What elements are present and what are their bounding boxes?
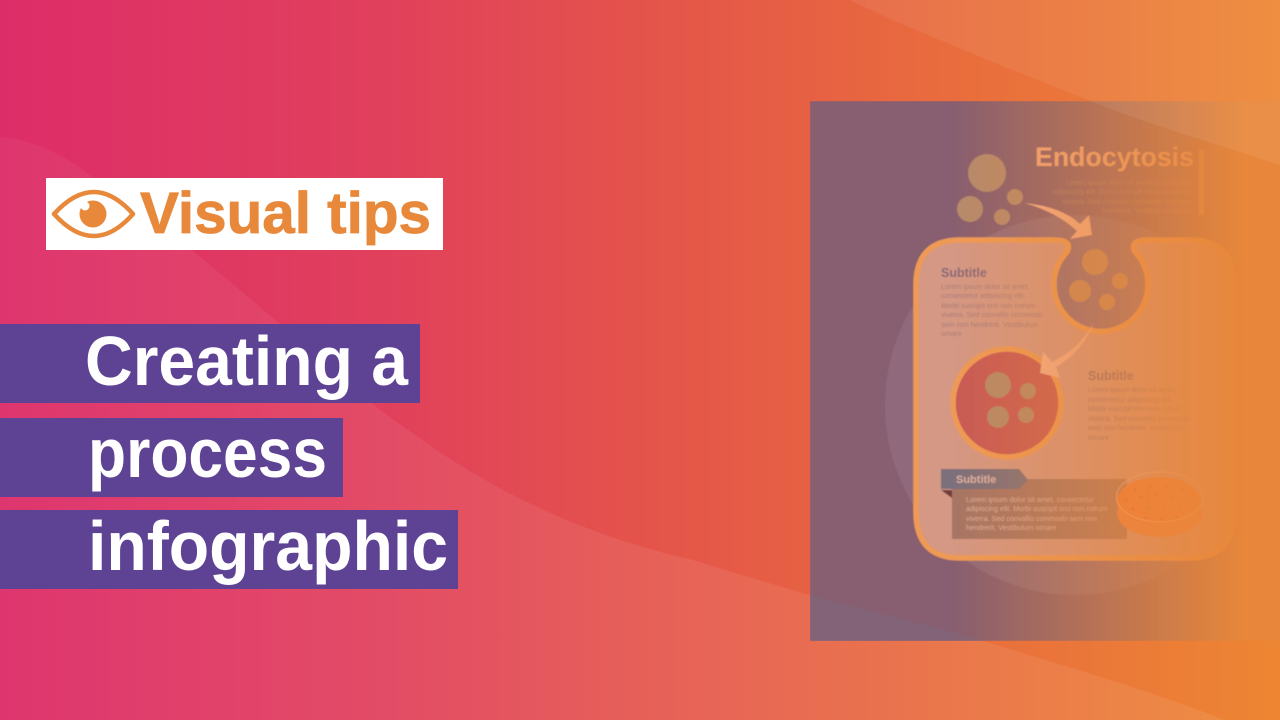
logo: Visual tips xyxy=(46,178,443,250)
particles in endosome xyxy=(985,372,1036,428)
endosome circle xyxy=(953,349,1061,457)
subtitle block one: sem non hendrerit. Vestibulum xyxy=(941,320,1038,329)
box text: Lorem ipsum dolor sit amet, consectetur xyxy=(966,495,1094,504)
subtitle block two: viverra. Sed convallis commodo xyxy=(1088,414,1189,423)
subtitle block two: consectetur adipiscing elit. xyxy=(1088,395,1172,404)
subtitle block one: consectetur adipiscing elit. xyxy=(941,291,1025,300)
box text: adipiscing elit. Morbi suscipit orci non rutrum xyxy=(966,504,1107,513)
ribbon label: Subtitle xyxy=(956,474,996,486)
title: infographic: infographic xyxy=(88,507,448,585)
text box xyxy=(952,479,1127,539)
subtitle block one: ornare xyxy=(941,329,962,338)
outside particles xyxy=(957,154,1023,225)
box text xyxy=(966,495,1107,532)
intro text: Lorem ipsum dolor sit amet, consectetur xyxy=(1066,179,1193,187)
subtitle block one: Lorem ipsum dolor sit amet, xyxy=(941,282,1030,291)
title: process: process xyxy=(88,414,327,492)
logo text: Visual tips xyxy=(140,181,431,246)
subtitle block two xyxy=(1088,369,1189,442)
subtitle block two: Subtitle xyxy=(1088,369,1134,383)
petri dish xyxy=(1116,472,1204,537)
arrow to endosome xyxy=(1040,323,1094,378)
title: process xyxy=(0,414,343,497)
ribbon xyxy=(941,469,1028,489)
subtitle block two: ornare xyxy=(1088,433,1109,442)
subtitle block one xyxy=(941,266,1042,338)
panel fade overlay xyxy=(950,101,1280,641)
subtitle block one: Morbi suscipit orci non rutrum xyxy=(941,301,1035,310)
intro text: adipiscing elit. Morbi suscipit orci non rutrum xyxy=(1052,188,1192,196)
ribbon fold xyxy=(941,490,952,498)
intro text: viverra. Sed convallis commodo sem non xyxy=(1063,198,1192,206)
wave tint inside panel xyxy=(809,595,987,642)
intro text xyxy=(1052,179,1193,215)
subtitle block one: viverra. Sed convallis commodo xyxy=(941,310,1042,319)
infographic preview panel xyxy=(810,101,1280,641)
icon: eye xyxy=(54,192,133,236)
intro text: hendrerit. Vestibulum ornare xyxy=(1103,207,1192,215)
box text: hendrerit. Vestibulum ornare xyxy=(966,523,1056,532)
wave overlay top right xyxy=(850,0,1280,165)
subtitle block two: Morbi suscipit orci non rutrum xyxy=(1088,404,1182,413)
subtitle block one: Subtitle xyxy=(941,266,987,280)
heading accent bar xyxy=(1199,150,1204,215)
title: Creating a: Creating a xyxy=(85,322,409,400)
box text: viverra. Sed convallis commodo sem non xyxy=(966,514,1097,523)
background circle xyxy=(885,215,1265,595)
cell body xyxy=(916,240,1234,558)
heading: Endocytosis: Endocytosis xyxy=(1035,142,1194,172)
particles in vesicle xyxy=(1069,249,1128,310)
arrow into cell xyxy=(1025,203,1092,239)
subtitle block two: Lorem ipsum dolor sit amet, xyxy=(1088,385,1177,394)
wave overlay lower left xyxy=(0,137,1224,720)
subtitle block two: sem non hendrerit. Vestibulum xyxy=(1088,423,1185,432)
